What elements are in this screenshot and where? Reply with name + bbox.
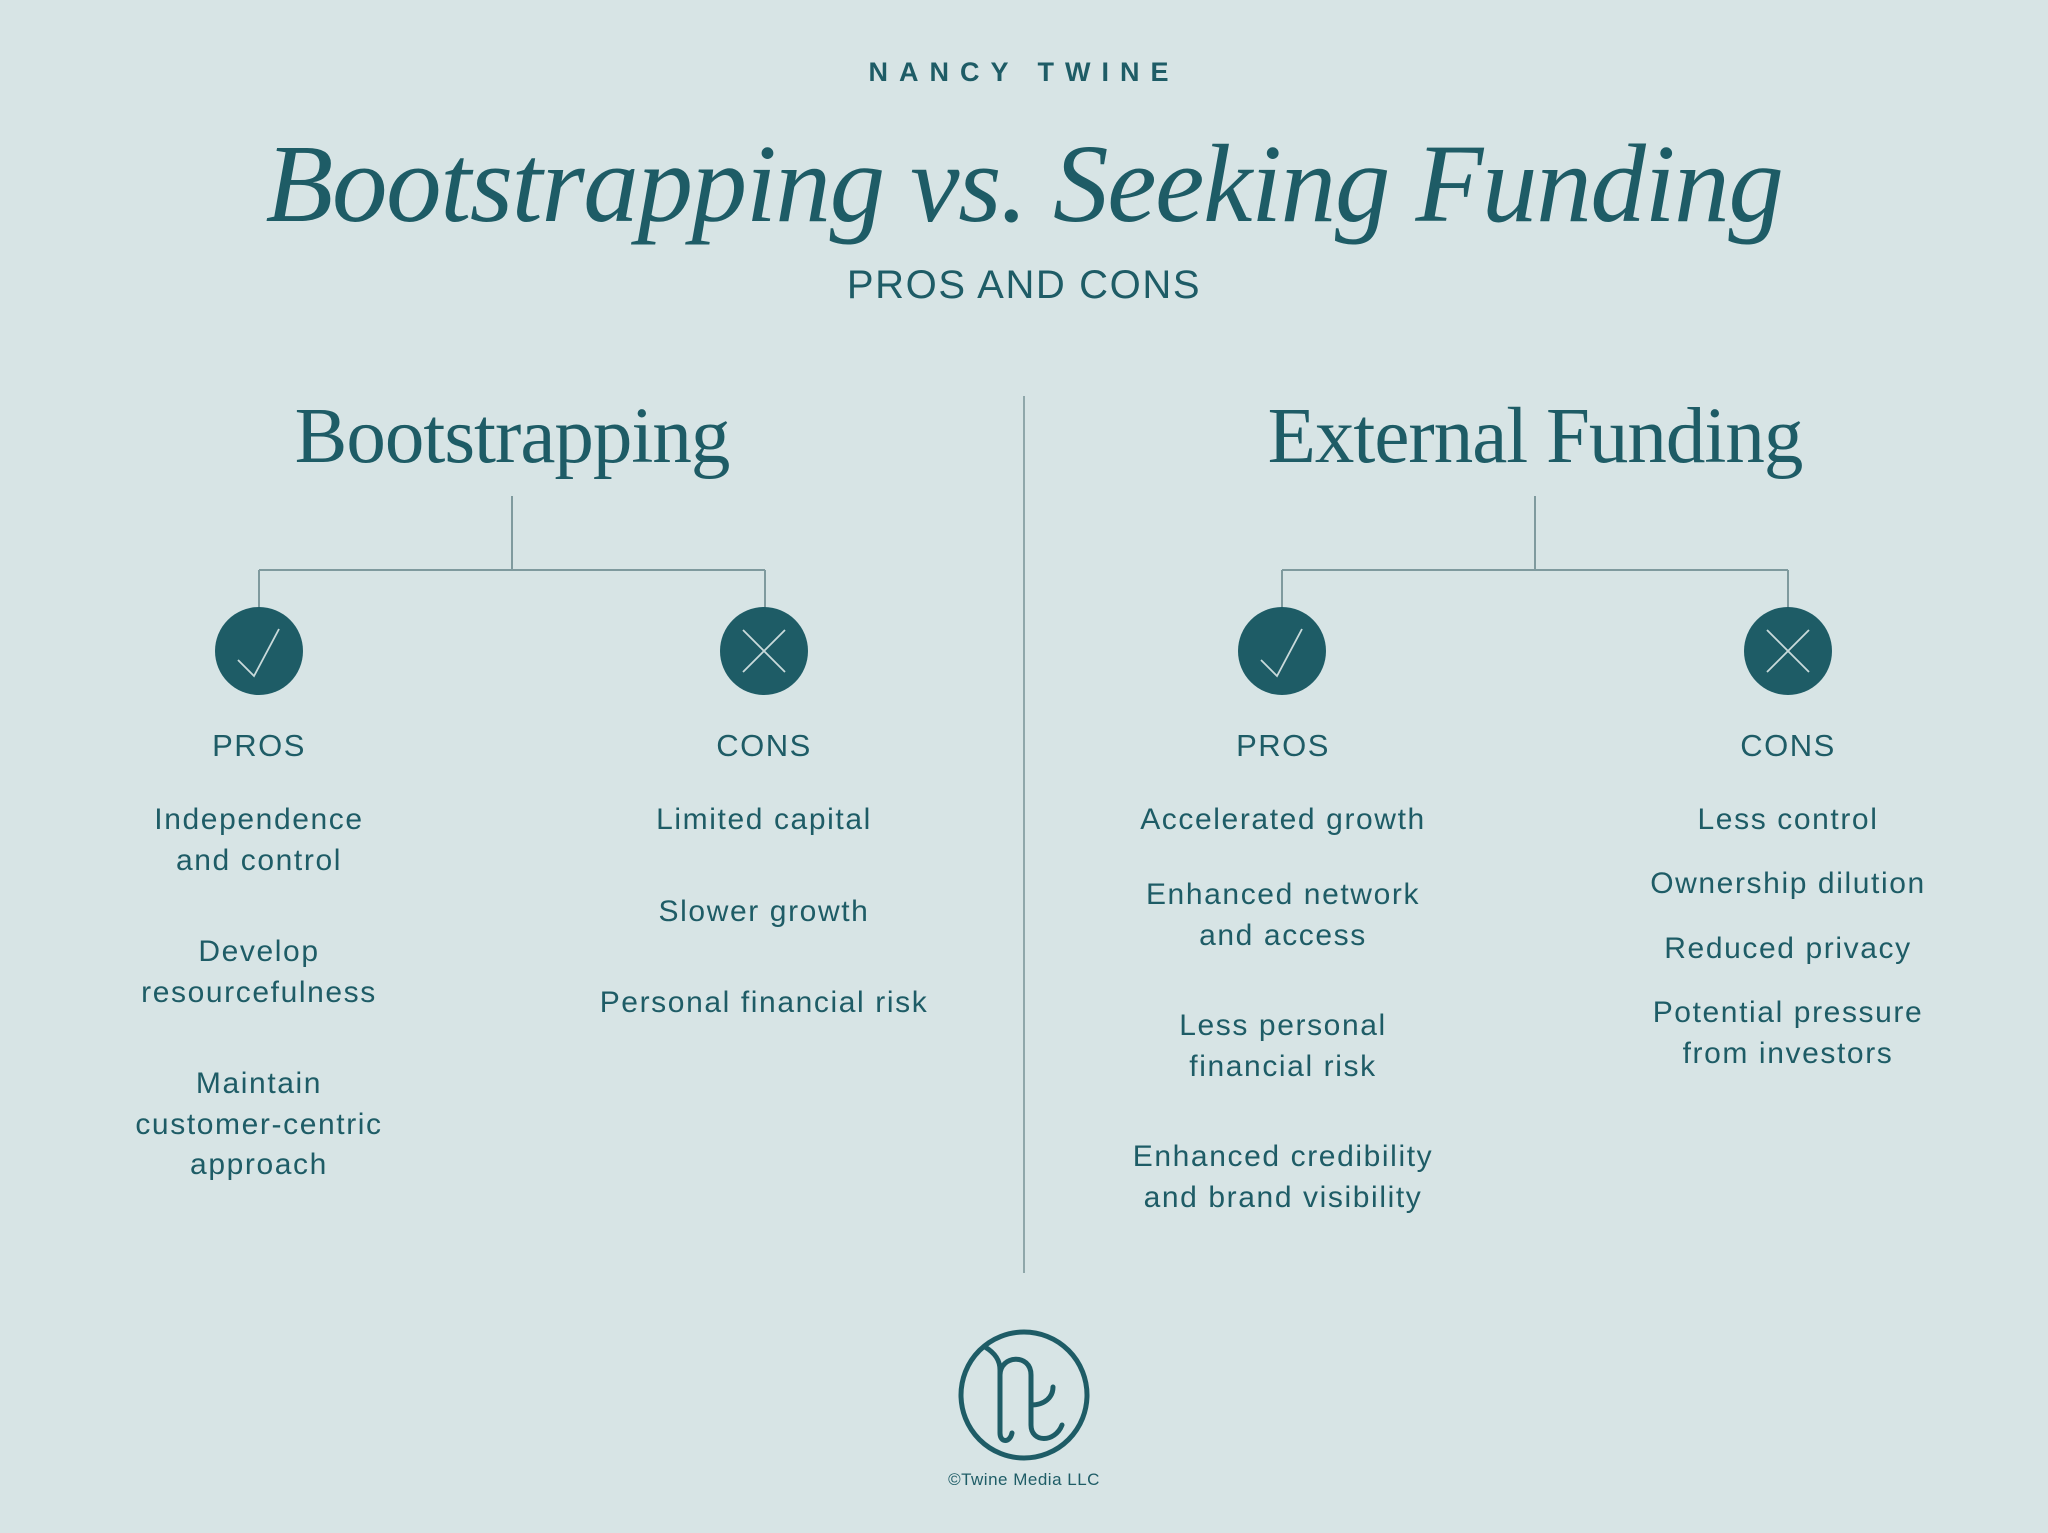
item: and access	[1199, 918, 1367, 952]
item: Potential pressure	[1653, 996, 1923, 1029]
item: Develop	[198, 935, 320, 968]
icon: check left	[215, 607, 303, 695]
icon: check right	[1238, 607, 1326, 695]
icon: x right	[1744, 607, 1832, 695]
label: cons left: CONS	[716, 728, 812, 763]
label: pros left: PROS	[212, 728, 306, 763]
item: Maintain	[196, 1067, 322, 1100]
item: financial risk	[1189, 1050, 1377, 1082]
label: pros right: PROS	[1236, 728, 1330, 763]
item	[141, 935, 377, 1008]
item	[1133, 1140, 1433, 1214]
subtitle: PROS AND CONS	[847, 263, 1201, 307]
bootstrapping pros list	[135, 803, 383, 1181]
external cons list	[1650, 803, 1926, 1070]
center divider	[1023, 396, 1025, 1273]
item: approach	[190, 1148, 328, 1181]
bootstrapping cons list	[600, 803, 928, 1019]
item	[135, 1067, 383, 1181]
item: Independence	[154, 803, 364, 836]
brand name: NANCY TWINE	[868, 57, 1180, 87]
item	[154, 803, 364, 876]
item: Ownership dilution	[1650, 867, 1926, 900]
item: Less personal	[1179, 1009, 1387, 1042]
heading: Bootstrapping: Bootstrapping	[295, 393, 729, 480]
item	[1146, 878, 1420, 952]
logo	[958, 1330, 1090, 1460]
item	[1653, 996, 1923, 1070]
item: Reduced privacy	[1664, 932, 1912, 965]
item: Enhanced credibility	[1133, 1140, 1433, 1173]
heading: External Funding: External Funding	[1268, 393, 1802, 480]
item: from investors	[1683, 1036, 1893, 1070]
label: cons right: CONS	[1740, 728, 1836, 763]
item: customer-centric	[135, 1108, 383, 1140]
item: and brand visibility	[1144, 1180, 1422, 1214]
item: resourcefulness	[141, 976, 377, 1008]
copyright: ©Twine Media LLC	[948, 1470, 1100, 1489]
item: Less control	[1698, 803, 1878, 836]
item: Accelerated growth	[1140, 803, 1426, 836]
tree connectors and icons	[215, 496, 1832, 695]
item: Limited capital	[656, 803, 872, 836]
title: Bootstrapping vs. Seeking Funding	[265, 123, 1783, 246]
item: Personal financial risk	[600, 986, 928, 1019]
item: Enhanced network	[1146, 878, 1420, 911]
item: and control	[176, 844, 342, 876]
icon: x left	[720, 607, 808, 695]
item: Slower growth	[659, 895, 869, 928]
external pros list	[1133, 803, 1433, 1214]
item	[1179, 1009, 1387, 1082]
